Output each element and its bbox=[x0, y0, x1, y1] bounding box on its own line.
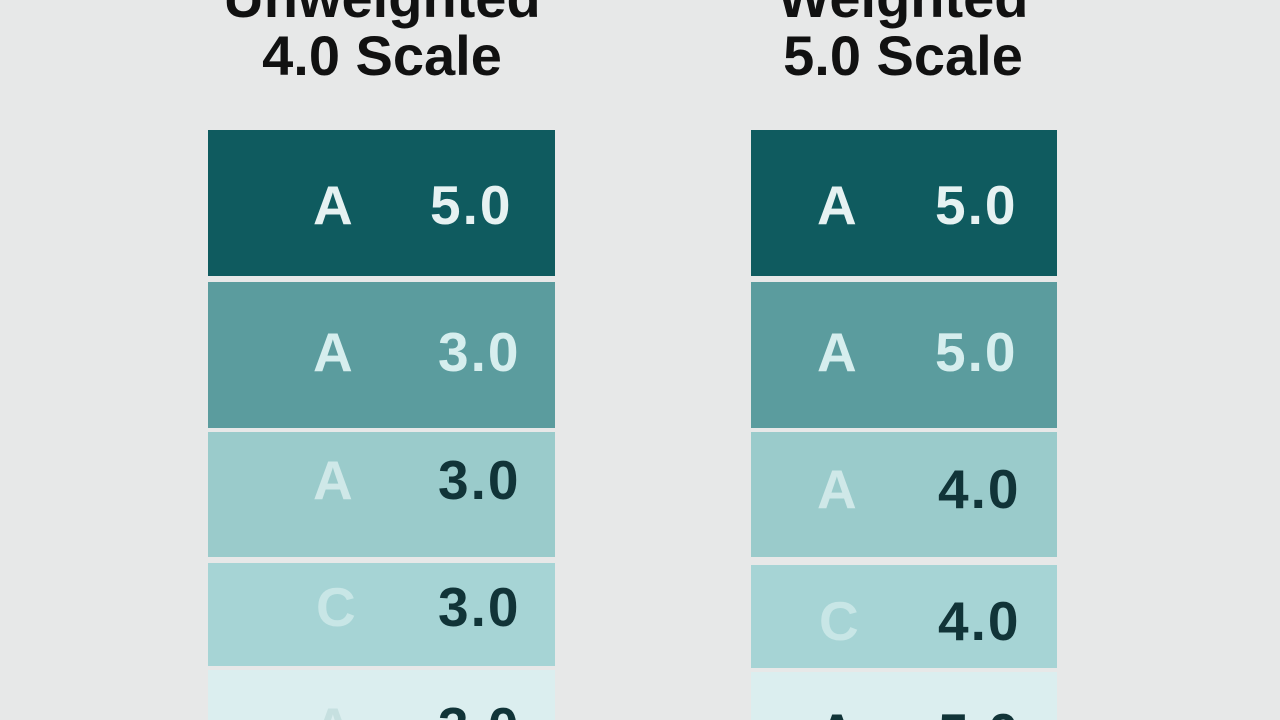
title: weighted: 5.0 Scale bbox=[783, 24, 1023, 87]
row 3 bbox=[751, 432, 1057, 557]
row 5 bbox=[208, 670, 555, 720]
title: unweighted: 4.0 Scale bbox=[262, 24, 502, 87]
row 1 bbox=[751, 130, 1057, 276]
table: unweighted bbox=[208, 130, 555, 720]
row 4 bbox=[751, 565, 1057, 668]
row 4 bbox=[208, 563, 555, 666]
row 2 bbox=[751, 282, 1057, 428]
row 5 bbox=[751, 672, 1057, 720]
title: weighted bbox=[778, 0, 1028, 87]
title: unweighted bbox=[223, 0, 541, 87]
row 1 bbox=[208, 130, 555, 276]
table: weighted bbox=[751, 130, 1057, 720]
row 3 bbox=[208, 432, 555, 557]
row 2 bbox=[208, 282, 555, 428]
